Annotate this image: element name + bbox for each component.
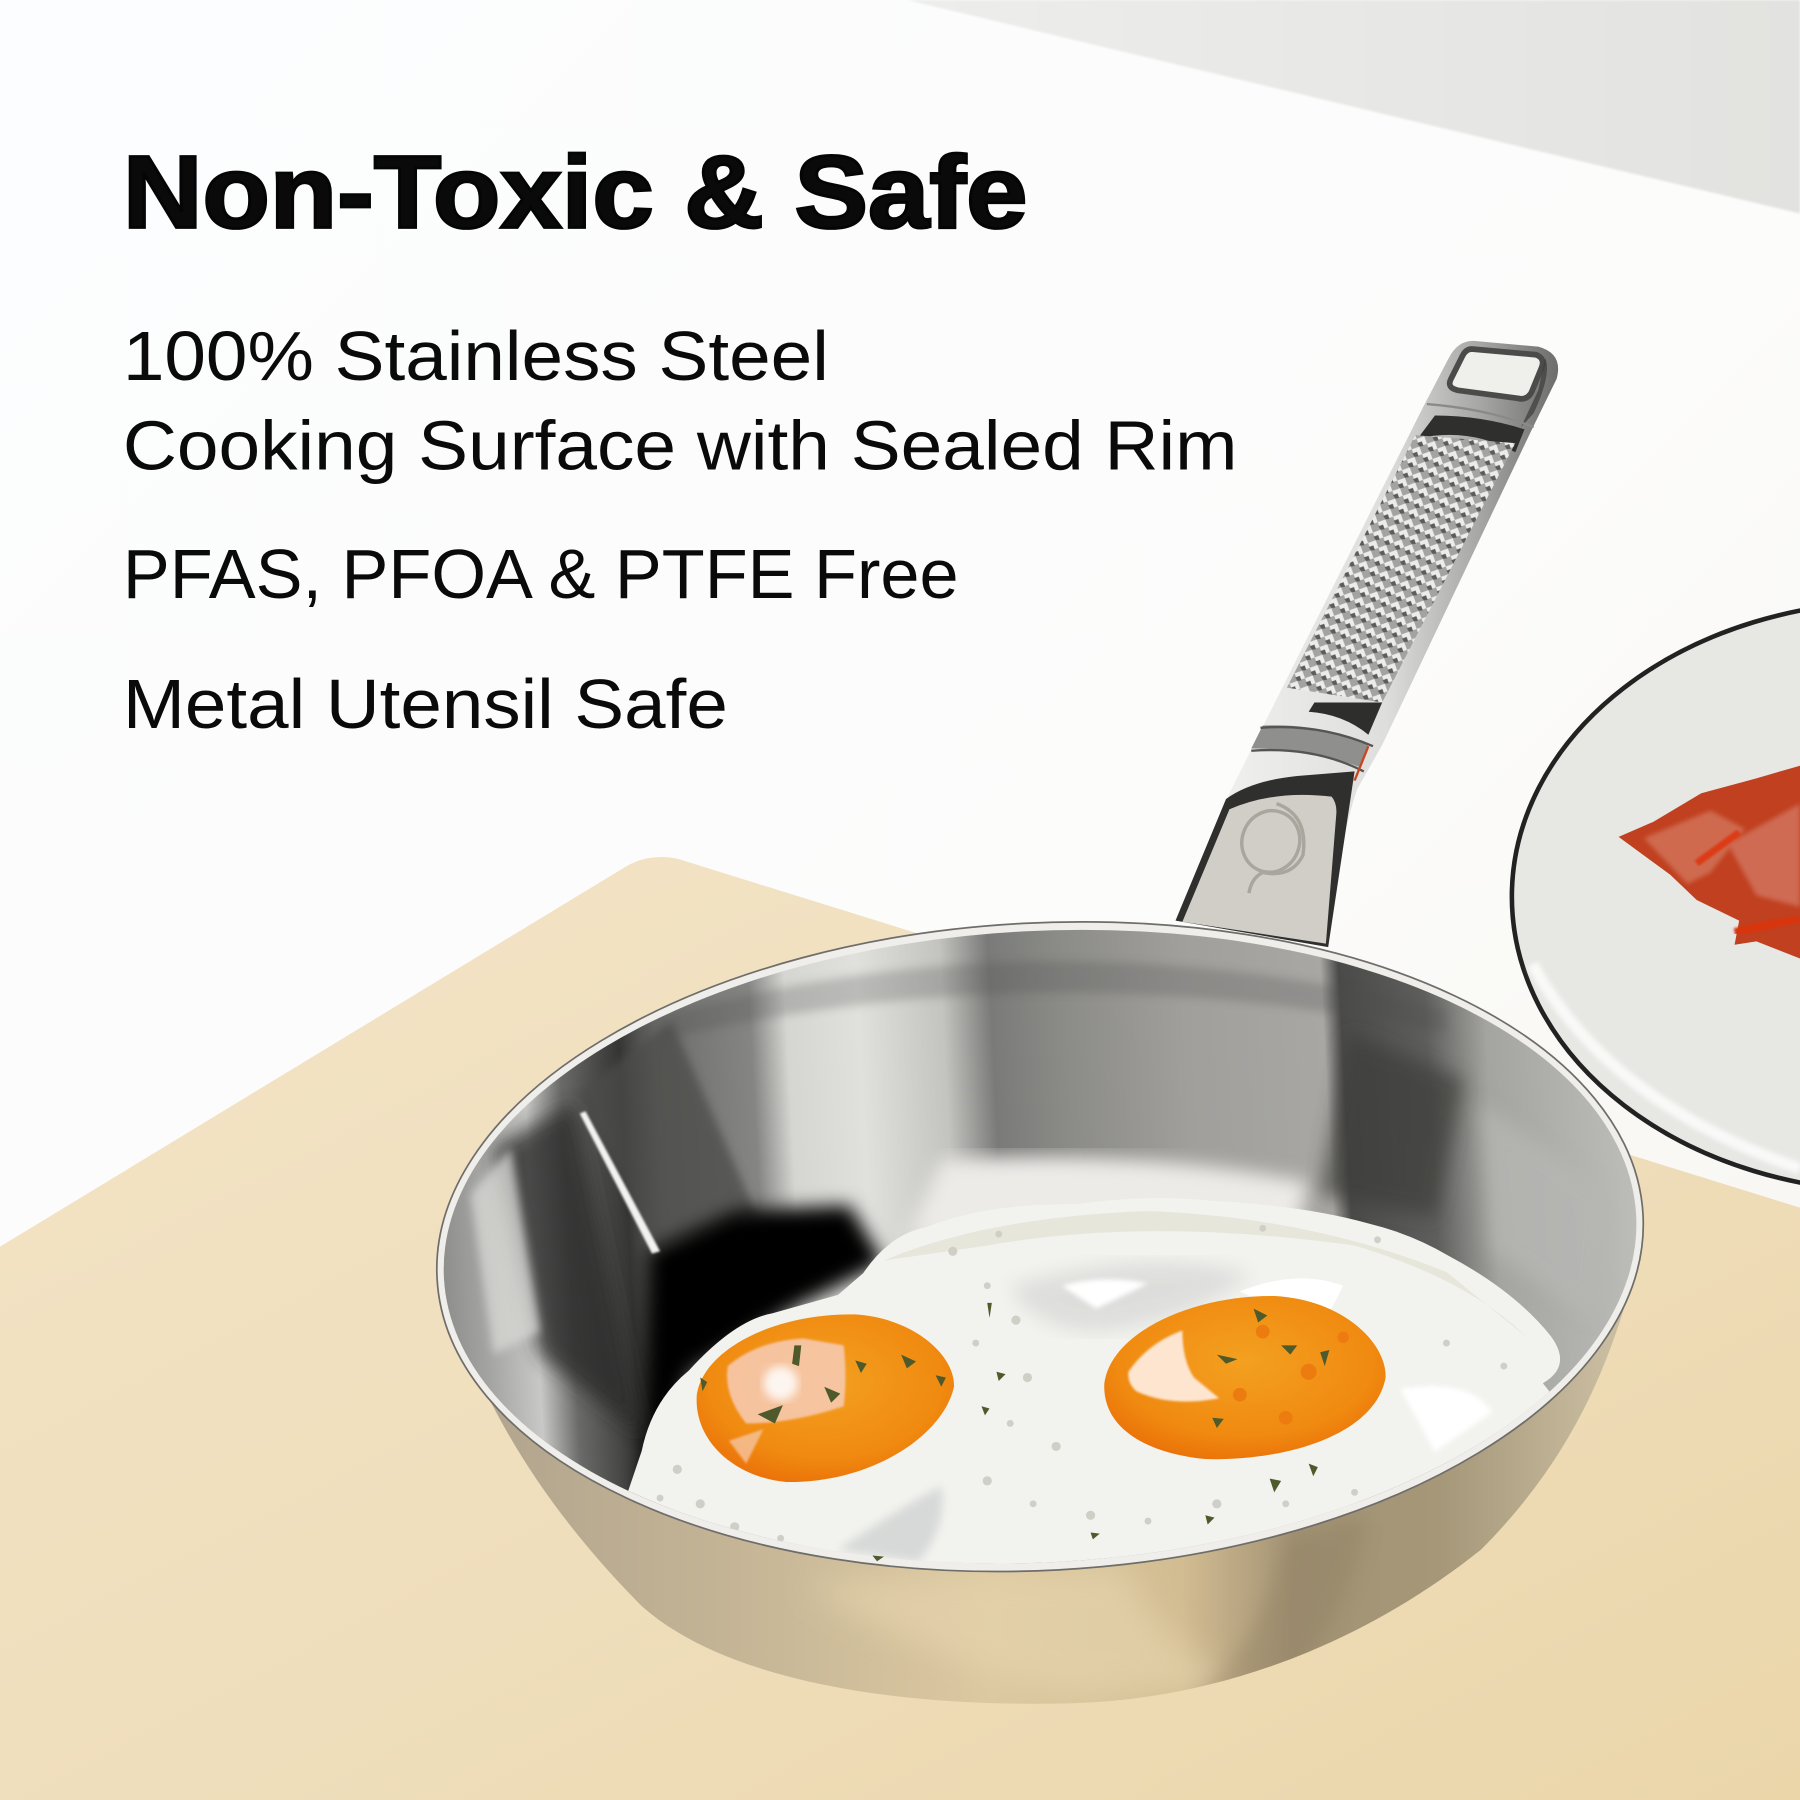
egg whites xyxy=(620,1198,1722,1607)
lacy egg rim xyxy=(884,1211,1527,1337)
feature: PFAS free: PFAS, PFOA & PTFE Free xyxy=(123,535,959,613)
textured grip xyxy=(1287,435,1515,703)
feature: metal utensil safe: Metal Utensil Safe xyxy=(123,665,728,743)
icon: bacon xyxy=(1619,766,1800,959)
neck reflections xyxy=(1418,416,1524,452)
feature list xyxy=(123,317,1237,743)
cutting board xyxy=(0,857,1800,1800)
herb flakes xyxy=(700,1303,1329,1561)
lower handle plate xyxy=(1176,771,1355,947)
pan handle xyxy=(1176,341,1558,947)
pan xyxy=(436,921,1644,1704)
right yolk xyxy=(1104,1296,1386,1459)
left wall highlight xyxy=(471,1148,540,1355)
feature: sealed rim: Cooking Surface with Sealed Rim xyxy=(123,407,1238,485)
hazy wall foot xyxy=(907,1157,1309,1240)
egg bubbles texture xyxy=(657,1225,1507,1542)
egg shading xyxy=(1010,1262,1251,1332)
background wall xyxy=(907,0,1800,214)
left yolk xyxy=(697,1314,954,1482)
left facet shadow xyxy=(608,1024,756,1246)
lower collar xyxy=(1309,703,1382,735)
title: Non-Toxic & Safe xyxy=(123,133,1027,249)
black reflection xyxy=(641,1205,884,1515)
feature: stainless steel: 100% Stainless Steel xyxy=(123,317,829,395)
plate with bacon xyxy=(1512,602,1800,1192)
bright streak xyxy=(580,1111,660,1254)
top band of the wall xyxy=(648,961,1444,1032)
pan outer body xyxy=(492,1308,1624,1704)
pan rim xyxy=(420,892,1660,1602)
right wall facet xyxy=(1320,1033,1464,1217)
icon: handle logo xyxy=(1233,803,1308,893)
handle eyelet xyxy=(1450,349,1543,399)
pan interior xyxy=(427,900,1653,1593)
